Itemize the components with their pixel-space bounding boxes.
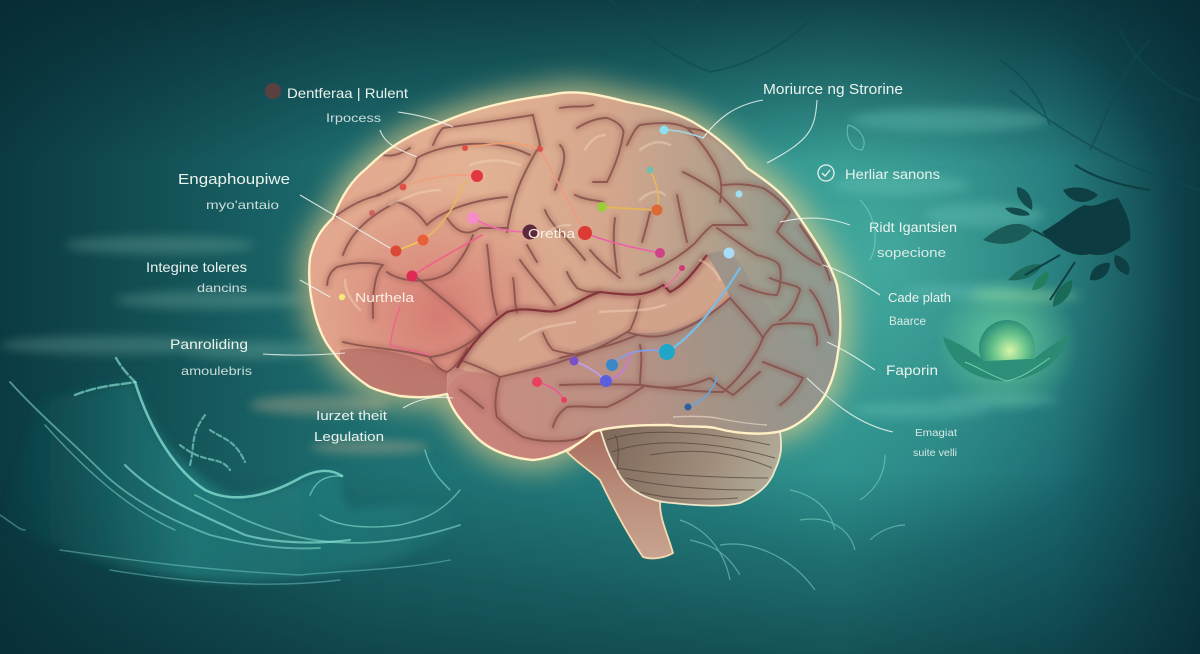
label: Emagiat (913, 428, 957, 459)
cerebellum (600, 422, 781, 506)
label: Oretha: Oretha (528, 227, 575, 241)
label: Integine toleres: Integine toleres (146, 259, 247, 275)
right labels (763, 82, 957, 459)
label: Ridt Igantsien: Ridt Igantsien (869, 220, 957, 235)
label: Cade plath: Cade plath (888, 291, 951, 305)
label: Emagiat: Emagiat (915, 428, 957, 439)
gyri and shading (300, 105, 838, 460)
neural nodes (339, 126, 742, 410)
label: Engaphoupiwe: Engaphoupiwe (178, 172, 290, 188)
label: Dentferaa: Irpocess (326, 111, 381, 125)
leafy branch (983, 165, 1150, 307)
label: Herliar sanons: Herliar sanons (845, 167, 940, 182)
left labels (146, 83, 408, 444)
leader lines (263, 100, 893, 432)
brain glow (309, 92, 841, 460)
label: Dentferaa: Dentferaa | Rulent (287, 85, 408, 101)
sea creatures (680, 125, 905, 590)
dark tree branches (610, 0, 1200, 190)
label: Engaphoupiwe: myo'antaio (206, 198, 279, 212)
neural pathways (390, 130, 740, 407)
label: Iurzet theit: Iurzet theit (316, 408, 387, 423)
label: Panroliding (170, 336, 252, 378)
label: Faporin: Faporin (886, 363, 938, 378)
label: Engaphoupiwe (178, 172, 290, 212)
label: Emagiat: suite velli (913, 448, 957, 459)
cerebrum (309, 92, 841, 460)
label: Dentferaa (265, 83, 408, 125)
label: Iurzet theit (314, 408, 387, 444)
label: Cade plath (888, 291, 951, 328)
label: Iurzet theit: Legulation (314, 429, 384, 444)
label: Cade plath: Baarce (889, 316, 926, 328)
label: Herliar sanons (818, 165, 940, 182)
label: Nurthela: Nurthela (355, 290, 415, 305)
waves (0, 358, 470, 584)
brain rim (309, 92, 841, 460)
label: Moriurce ng Strorine: Moriurce ng Strorine (763, 82, 903, 98)
label: Panroliding: Panroliding (170, 336, 248, 352)
label: Ridt Igantsien (869, 220, 957, 260)
clouds (0, 108, 1080, 454)
label: Ridt Igantsien: sopecione (877, 246, 946, 260)
brain illustration (300, 92, 840, 558)
label: Integine toleres: dancins (197, 281, 247, 295)
label: Integine toleres (146, 259, 247, 295)
label: Panroliding: amoulebris (181, 364, 252, 378)
brain stem (567, 428, 680, 558)
lotus with glowing orb (935, 273, 1079, 417)
